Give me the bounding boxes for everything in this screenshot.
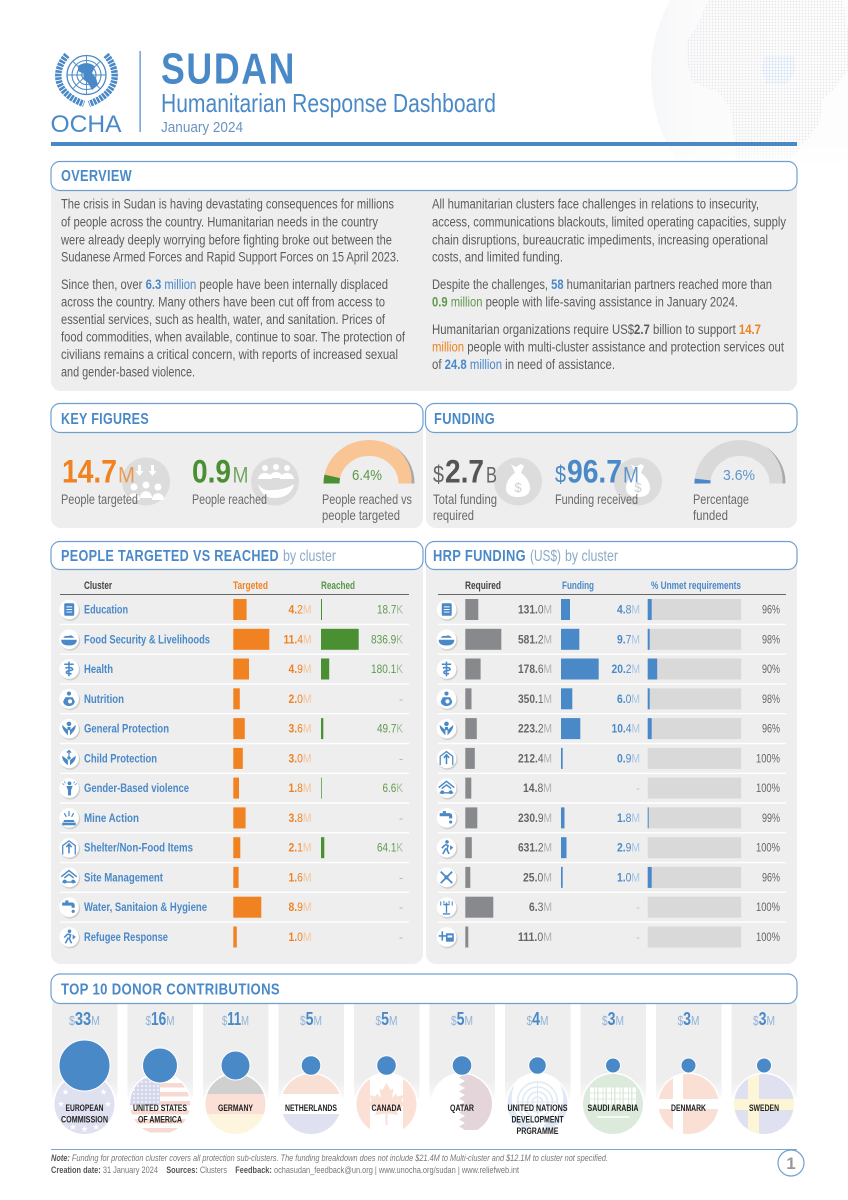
panel: HRP funding xyxy=(426,542,797,964)
donor: Netherlands xyxy=(280,1009,342,1136)
row: Child Protection: - xyxy=(399,751,403,765)
row: Gender-Based violence: 6.6K xyxy=(382,781,403,795)
row: Child Protection: Child Protection xyxy=(84,751,157,765)
gauge: percentage funded xyxy=(693,445,786,523)
icon: people reached xyxy=(251,458,299,506)
donor: Sweden xyxy=(732,1009,796,1136)
row: Site Management: Site Management xyxy=(84,870,163,884)
donor card backgrounds xyxy=(52,1000,797,1100)
panel: overview xyxy=(51,162,797,391)
table header: Targeted xyxy=(233,580,268,592)
figure: funding received xyxy=(555,454,639,507)
row: Nutrition funding xyxy=(437,688,780,710)
row: Education funding xyxy=(437,599,780,621)
row: Coordination funding: 25.0M xyxy=(523,870,552,884)
donor: UNDP: UNITED NATIONS xyxy=(508,1103,568,1114)
overview text left column: civilians remains a critical concern, with reports of increased sexual xyxy=(61,347,398,362)
row: Food funding: 581.2M xyxy=(518,632,552,646)
row: Shelter funding xyxy=(437,748,780,770)
table header: Reached xyxy=(321,580,355,592)
row: Site Management: 1.6M xyxy=(288,870,312,884)
row: Coordination funding: 96% xyxy=(762,870,780,884)
row: Logistics funding: - xyxy=(636,930,640,944)
row: Health funding xyxy=(437,658,780,680)
row: Telecoms funding: 100% xyxy=(756,900,780,914)
row: Shelter: 64.1K xyxy=(377,841,403,855)
logo wordmark: OCHA xyxy=(50,111,122,138)
row: Water, Sanitation: Water, Sanitaion & Hygiene xyxy=(84,900,207,914)
donor: Denmark xyxy=(657,1009,720,1136)
date: January 2024 xyxy=(161,119,243,136)
heading: HRP funding: by cluster xyxy=(565,548,619,565)
row: Refugee Response: Refugee Response xyxy=(84,930,168,944)
donor: Sweden: SWEDEN xyxy=(749,1103,779,1114)
overview text right column: access, communications blackouts, limited operating capacities, supply xyxy=(432,214,786,230)
gauge: percentage funded: Percentage xyxy=(693,492,749,507)
donor: European Commission xyxy=(53,1009,116,1136)
row: Child Protection: 3.0M xyxy=(288,751,312,765)
row: Shelter xyxy=(59,837,403,859)
gauge: percentage funded: funded xyxy=(693,508,728,523)
row: Site Management: - xyxy=(399,870,403,884)
row: Mine Action xyxy=(59,807,403,829)
row: Food Security: 836.9K xyxy=(371,632,403,646)
heading: overview xyxy=(51,162,797,190)
heading: HRP funding: HRP FUNDING xyxy=(433,548,526,565)
overview text left column: and gender-based violence. xyxy=(61,364,195,380)
row: Coordination funding xyxy=(437,867,780,889)
row: Site management funding: 14.8M xyxy=(523,781,552,795)
row: Protection funding: 96% xyxy=(762,722,780,736)
footer note: Note: Funding for protection cluster covers all protection sub-clusters. The funding breakdown does not include $21.4M to Multi-cluster and $12.1M to cluster not specified. xyxy=(51,1153,608,1164)
panel: people targeted vs reached xyxy=(51,542,423,964)
gauge: percentage funded: 3.6% xyxy=(723,467,755,484)
figure: people targeted xyxy=(61,454,138,507)
row: Mine Action: 3.8M xyxy=(288,811,312,825)
figure: people targeted: People targeted xyxy=(61,492,138,507)
overview text right column: chain disruptions, bureaucratic impediments, increasing operational xyxy=(432,232,768,248)
row: Water funding: 1.8M xyxy=(617,811,640,825)
title: Sudan: SUDAN xyxy=(161,44,296,94)
panel: funding xyxy=(426,404,797,528)
row: Food Security: Food Security & Livelihoods xyxy=(84,632,210,646)
row: Education: Education xyxy=(84,602,128,616)
row: Water funding: 230.9M xyxy=(518,811,552,825)
figure: people reached: M xyxy=(232,462,248,488)
row: Water funding: 99% xyxy=(762,811,780,825)
page number xyxy=(778,1150,804,1176)
panel: key figures xyxy=(51,404,423,528)
row: Health funding: 20.2M xyxy=(612,662,640,676)
donor: Netherlands: $5M xyxy=(300,1009,322,1029)
heading: people targeted vs reached: PEOPLE TARGETED VS REACHED xyxy=(61,548,279,565)
footer note xyxy=(51,1149,797,1176)
row: General Protection: General Protection xyxy=(84,722,169,736)
row: Shelter funding: 100% xyxy=(756,751,780,765)
row: General Protection: 49.7K xyxy=(377,722,403,736)
row: Food Security: 11.4M xyxy=(284,632,312,646)
heading: people targeted vs reached: by cluster xyxy=(283,548,337,565)
donor: European Commission: EUROPEAN xyxy=(66,1103,104,1114)
overview text right column: 0.9 million people with life-saving assistance in January 2024. xyxy=(432,294,738,310)
row: Site management funding: 100% xyxy=(756,781,780,795)
row: Gender-Based violence xyxy=(59,778,403,799)
title block xyxy=(140,44,496,136)
overview text right column: All humanitarian clusters face challenges in relations to insecurity, xyxy=(432,196,759,212)
overview text left column: Since then, over 6.3 million people have been internally displaced xyxy=(61,277,388,292)
heading: key figures xyxy=(51,404,423,432)
icon: money bag xyxy=(494,458,542,506)
gauge: reached vs targeted: People reached vs xyxy=(322,492,412,507)
figure: total funding: $ xyxy=(433,462,444,488)
row: Nutrition: - xyxy=(399,692,403,706)
donor: Canada: CANADA xyxy=(372,1103,402,1114)
row: Education funding: 96% xyxy=(762,602,780,616)
row: Health funding: 178.6M xyxy=(518,662,552,676)
donor: UNDP: DEVELOPMENT xyxy=(512,1114,564,1126)
heading: people targeted vs reached xyxy=(51,542,423,570)
overview text right column: Humanitarian organizations require US$2.7 billion to support 14.7 xyxy=(432,322,761,337)
row: Gender-Based violence: Gender-Based violence xyxy=(84,781,189,795)
figure: total funding: 2.7 xyxy=(445,454,484,490)
row: Water funding xyxy=(437,807,780,829)
row: Site management funding: - xyxy=(636,781,640,795)
icon: money bag received: $ xyxy=(634,480,642,495)
table header: Funding xyxy=(562,580,594,592)
heading: funding: FUNDING xyxy=(434,411,495,428)
donor: Canada: $5M xyxy=(376,1009,398,1029)
row: Nutrition funding: 98% xyxy=(762,692,780,706)
table header: Required xyxy=(465,580,501,592)
donor: Saudi Arabia: SAUDI ARABIA xyxy=(588,1103,639,1114)
row: Refugee funding: 2.9M xyxy=(617,841,640,855)
subtitle: Humanitarian Response Dashboard xyxy=(161,88,496,118)
row: Health xyxy=(59,658,403,680)
donor: UNDP: $4M xyxy=(526,1009,548,1029)
overview text left column: essential services, such as health, water, and sanitation. Prices of xyxy=(61,312,385,327)
donor: Netherlands: NETHERLANDS xyxy=(285,1103,337,1114)
gauge: reached vs targeted xyxy=(322,445,415,523)
heading: key figures: KEY FIGURES xyxy=(61,411,149,428)
row: Water, Sanitation: 8.9M xyxy=(288,900,312,914)
figure: people targeted: 14.7 xyxy=(62,454,117,490)
row: Education: 18.7K xyxy=(377,602,403,616)
overview text left column xyxy=(60,196,405,380)
page number: 1 xyxy=(786,1154,796,1173)
row: Health: Health xyxy=(84,662,113,676)
logo: OCHA xyxy=(50,55,122,138)
donor: Qatar: QATAR xyxy=(450,1103,474,1114)
overview text left column: of people across the country. Humanitarian needs in the country xyxy=(61,214,378,230)
overview text left column: food commodities, when available, continue to soar. The protection of xyxy=(61,330,405,344)
icon: money bag: $ xyxy=(514,480,522,495)
row: Refugee funding: 631.2M xyxy=(518,841,552,855)
donor: European Commission: $33M xyxy=(69,1009,100,1029)
heading: HRP funding: (US$) xyxy=(530,548,561,565)
figure: people reached xyxy=(192,454,267,507)
globe background xyxy=(651,0,848,158)
donor: Qatar: $5M xyxy=(451,1009,473,1029)
row: Logistics funding: 100% xyxy=(756,930,780,944)
row: Site management funding xyxy=(437,778,780,799)
donor: United States: OF AMERICA xyxy=(138,1114,182,1126)
row: Nutrition funding: 350.1M xyxy=(518,692,552,706)
row: Telecoms funding xyxy=(437,897,780,919)
row: Health: 180.1K xyxy=(371,662,403,676)
row: Nutrition xyxy=(59,688,403,710)
row: Food funding: 98% xyxy=(762,632,780,646)
figure: people reached: 0.9 xyxy=(192,454,231,490)
donor: Sweden: $3M xyxy=(753,1009,775,1029)
donor: Germany: GERMANY xyxy=(218,1103,253,1114)
donor: Saudi Arabia: $3M xyxy=(602,1009,624,1029)
row: Refugee Response: 1.0M xyxy=(288,930,312,944)
row: Nutrition: Nutrition xyxy=(84,692,124,706)
figure: total funding: required xyxy=(433,508,474,523)
overview text left column: were already deeply worrying before fighting broke out between the xyxy=(60,232,392,248)
donor: Germany: $11M xyxy=(222,1009,249,1029)
figure: funding received: $ xyxy=(555,462,566,488)
donor: United States: UNITED STATES xyxy=(133,1103,187,1114)
row: Nutrition: 2.0M xyxy=(288,692,312,706)
icon: people targeted xyxy=(122,458,170,506)
row: Child Protection xyxy=(59,748,403,770)
row: Health funding: 90% xyxy=(762,662,780,676)
row: Food funding: 9.7M xyxy=(617,632,640,646)
donor: Denmark: $3M xyxy=(678,1009,700,1029)
row: Education funding: 4.8M xyxy=(617,602,640,616)
row: Logistics funding xyxy=(437,926,780,948)
row: Refugee Response xyxy=(59,926,403,948)
donor: UNDP xyxy=(506,1009,569,1137)
row: General Protection xyxy=(59,718,403,740)
overview text left column: across the country. Many others have been cut off from access to xyxy=(61,294,385,310)
row: Coordination funding: 1.0M xyxy=(617,870,640,884)
donor: Denmark: DENMARK xyxy=(671,1103,706,1114)
row: Shelter funding: 0.9M xyxy=(617,751,640,765)
footer note: Creation date: 31 January 2024 Sources: Clusters Feedback: ochasudan_feedback@un.org | www.unocha.org/sudan | www.reliefweb.int xyxy=(51,1165,519,1176)
row: Education: 4.2M xyxy=(288,602,312,616)
row: Shelter: Shelter/Non-Food Items xyxy=(84,841,193,855)
donor: United States xyxy=(128,1009,192,1136)
row: Refugee funding xyxy=(437,837,780,859)
row: Site Management xyxy=(59,867,403,889)
heading: donors xyxy=(51,974,797,1004)
figure: people targeted: M xyxy=(118,462,135,488)
row: Refugee funding: 100% xyxy=(756,841,780,855)
row: Protection funding: 10.4M xyxy=(612,722,640,736)
donor: United States: $16M xyxy=(146,1009,174,1029)
gauge: reached vs targeted: people targeted xyxy=(322,508,400,523)
overview text right column: Despite the challenges, 58 humanitarian partners reached more than xyxy=(432,277,772,292)
table header xyxy=(60,580,409,595)
heading: donors: TOP 10 DONOR CONTRIBUTIONS xyxy=(61,982,280,998)
donor: UNDP: PRGRAMME xyxy=(516,1126,559,1137)
row: General Protection: 3.6M xyxy=(288,722,312,736)
donor: Canada xyxy=(356,1012,416,1129)
overview text right column xyxy=(432,196,786,372)
row: Telecoms funding: 6.3M xyxy=(529,900,552,914)
row: Water, Sanitation xyxy=(59,897,403,919)
figure: total funding: B xyxy=(486,462,497,488)
figure: total funding: Total funding xyxy=(433,492,497,507)
table header: Cluster xyxy=(84,580,113,592)
table header xyxy=(438,580,786,595)
row: Telecoms funding: - xyxy=(636,900,640,914)
row: Health: 4.9M xyxy=(288,662,312,676)
heading: HRP funding xyxy=(426,542,797,570)
figure: funding received: M xyxy=(623,462,639,488)
panel: top 10 donor contributions xyxy=(51,974,797,1137)
row: Protection funding xyxy=(437,718,780,740)
row: Shelter funding: 212.4M xyxy=(518,751,552,765)
row: Logistics funding: 111.0M xyxy=(518,930,552,944)
row: Shelter: 2.1M xyxy=(288,841,312,855)
icon: money bag received xyxy=(614,458,662,506)
row: Refugee Response: - xyxy=(399,930,403,944)
row: Nutrition funding: 6.0M xyxy=(617,692,640,706)
overview text left column: Sudanese Armed Forces and Rapid Support Forces on 15 April 2023. xyxy=(61,250,399,264)
row: Mine Action: - xyxy=(399,811,403,825)
donor: Germany xyxy=(204,1009,267,1136)
gauge: reached vs targeted: 6.4% xyxy=(352,467,382,484)
row: Water, Sanitation: - xyxy=(399,900,403,914)
row: Mine Action: Mine Action xyxy=(84,811,139,825)
overview text right column: of 24.8 million in need of assistance. xyxy=(432,357,615,372)
figure: total funding xyxy=(433,454,497,523)
table header: % Unmet requirements xyxy=(651,580,741,592)
donor: Qatar xyxy=(432,1012,492,1130)
figure: funding received: 96.7 xyxy=(567,454,622,490)
overview text left column: The crisis in Sudan is having devastating consequences for millions xyxy=(61,196,394,212)
row: Protection funding: 223.2M xyxy=(518,722,552,736)
heading: funding xyxy=(426,404,797,432)
row: Food Security xyxy=(59,629,403,651)
row: Gender-Based violence: 1.8M xyxy=(288,781,312,795)
row: Food funding xyxy=(437,629,780,651)
overview text right column: million people with multi-cluster assistance and protection services out xyxy=(432,340,784,354)
donor: European Commission: COMMISSION xyxy=(61,1114,108,1126)
row: Education funding: 131.0M xyxy=(518,602,552,616)
figure: people reached: People reached xyxy=(192,492,267,507)
donor: Saudi Arabia xyxy=(582,1009,644,1136)
row: Education xyxy=(59,599,403,621)
overview text right column: costs, and limited funding. xyxy=(432,250,563,264)
heading: overview: OVERVIEW xyxy=(61,168,132,185)
figure: funding received: Funding received xyxy=(555,492,638,507)
